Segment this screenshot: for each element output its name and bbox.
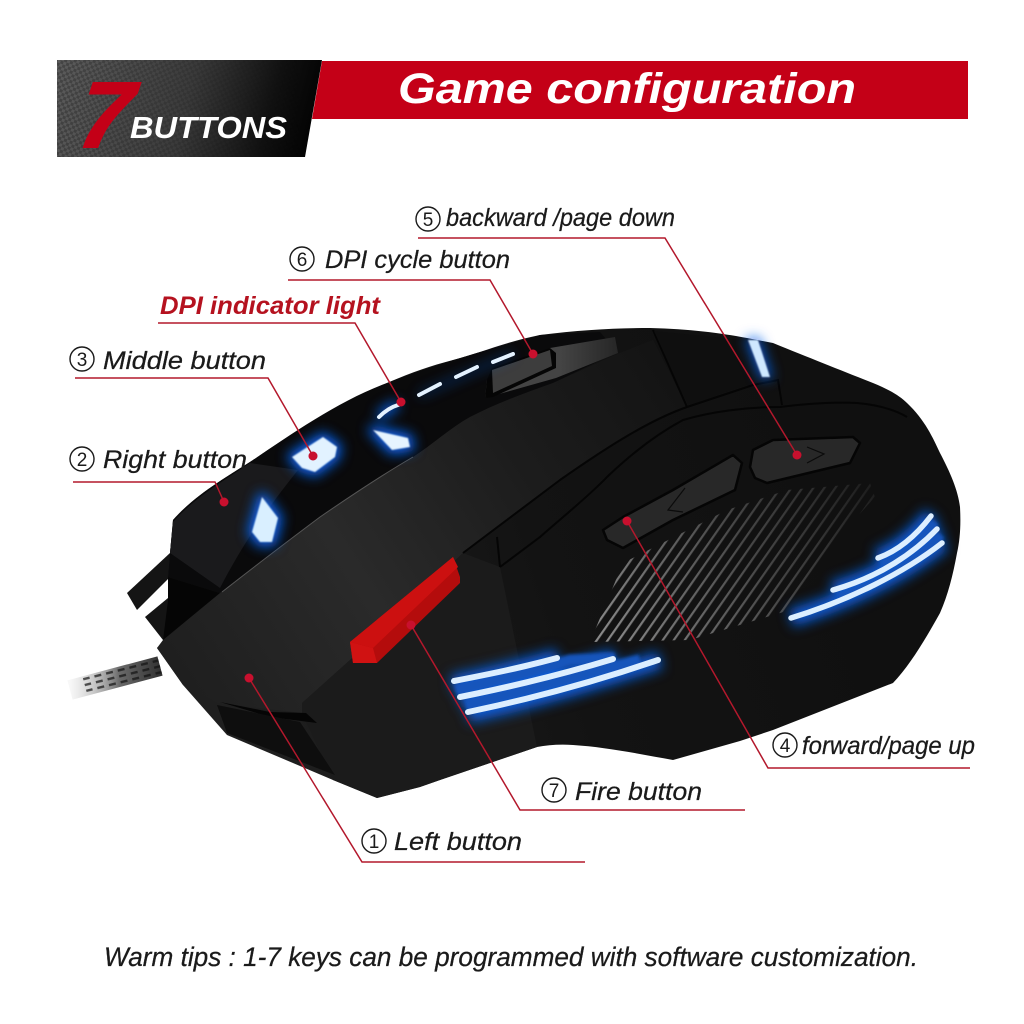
grip hatching (594, 484, 874, 642)
callout 5: backward / page down (416, 204, 802, 460)
callout 1: Left button: 1 (369, 832, 379, 853)
callout 7: Fire button: 7 (549, 781, 559, 802)
callout 6: DPI cycle button: 6 (297, 250, 307, 271)
callout 4: forward / page up: 4 (780, 736, 791, 757)
callout 4: forward / page up (622, 516, 975, 768)
badge label BUTTONS: BUTTONS (130, 110, 287, 145)
backward side button (750, 437, 860, 483)
callout 5: backward / page down: 5 (423, 210, 433, 231)
callout 6: DPI cycle button: DPI cycle button (325, 246, 510, 274)
callout 6: DPI cycle button (288, 246, 538, 358)
mouse body silhouette (157, 328, 960, 798)
red fire button (350, 557, 460, 663)
lower-left panel (302, 553, 537, 798)
callout 5: backward / page down: backward /page down (446, 204, 675, 232)
front scroll prongs (127, 553, 175, 640)
LED: right button (252, 497, 278, 542)
DPI button housing (485, 337, 618, 398)
front notch shadow (163, 577, 220, 640)
LED: rear top (748, 340, 770, 377)
callout: DPI indicator light (158, 292, 406, 406)
forward side button (603, 455, 742, 548)
rear top panel (654, 331, 753, 405)
red title band (312, 61, 968, 119)
callout 7: Fire button (406, 620, 745, 810)
callout: DPI indicator light: DPI indicator light (160, 292, 382, 320)
callout 3: Middle button: Middle button (103, 347, 266, 375)
top button strip (168, 332, 617, 593)
header banner (57, 60, 968, 167)
callout 2: Right button: Right button (103, 446, 247, 474)
callout 7: Fire button: Fire button (575, 778, 702, 806)
callout 2: Right button: 2 (77, 450, 87, 471)
vent slit (220, 702, 317, 723)
footer tip: Warm tips : 1-7 keys can be programmed with software customization. (104, 942, 918, 972)
braided cable (70, 666, 160, 690)
callout 4: forward / page up: forward/page up (802, 732, 975, 760)
leader lines and labels (70, 204, 975, 862)
title: Game configuration (398, 65, 856, 113)
side light bars left (452, 658, 660, 714)
callout 1: Left button: Left button (394, 828, 522, 856)
LED glows (252, 340, 770, 542)
DPI cycle button (485, 348, 556, 398)
LED: upper scroll (373, 430, 410, 450)
vent grille (217, 705, 335, 775)
thin highlight seam between strip and shell (222, 457, 413, 592)
side light bars right (791, 515, 943, 618)
callout 2: Right button (70, 446, 247, 506)
callout 3: Middle button (70, 347, 318, 460)
mouse illustration (70, 328, 960, 798)
callout 1: Left button (244, 674, 585, 862)
carbon fibre badge (57, 60, 322, 157)
LED: middle button (292, 437, 337, 472)
main shell face (157, 340, 687, 713)
glossy strip highlight (170, 463, 298, 588)
big number 7: 7 (73, 62, 144, 167)
DPI indicator dashes (379, 354, 513, 417)
callout 3: Middle button: 3 (77, 350, 87, 371)
rear shell seams (463, 330, 907, 567)
